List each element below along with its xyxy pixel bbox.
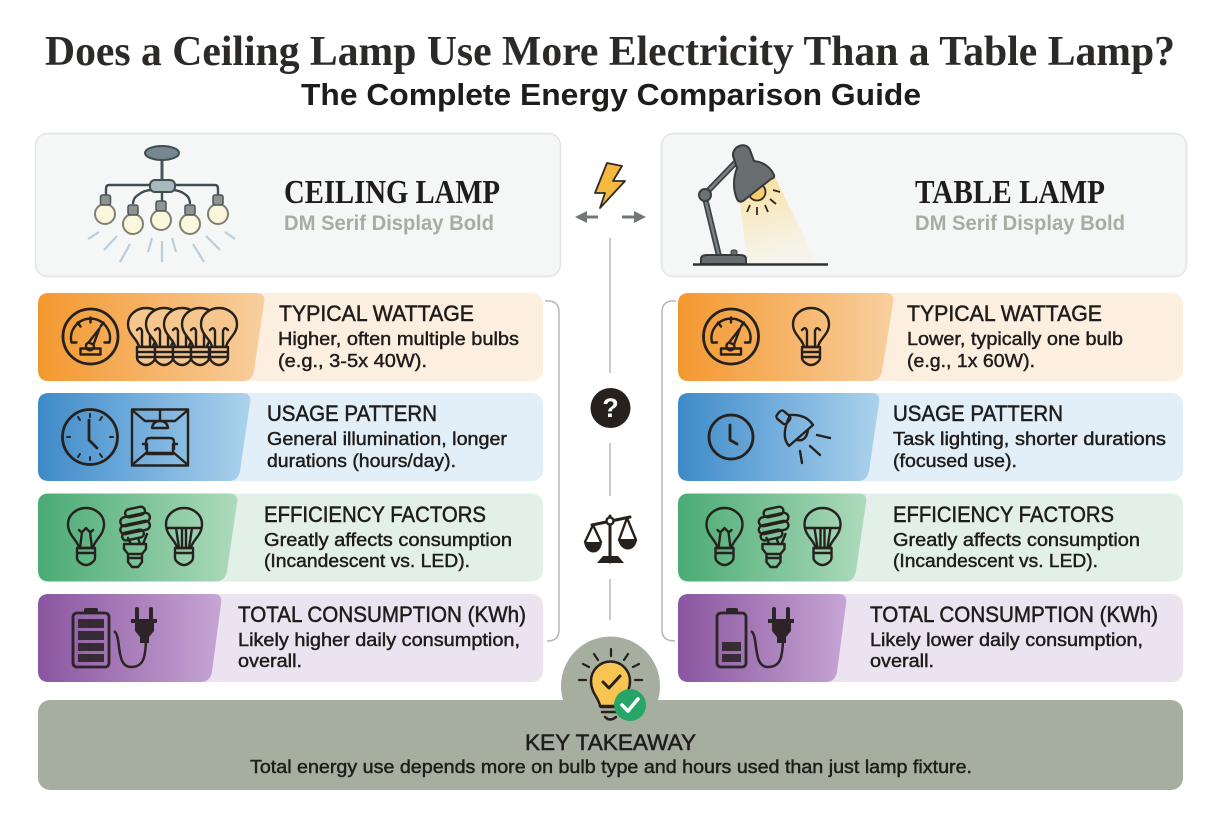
icon: three bulb types <box>706 506 840 567</box>
text: table consumption: TOTAL CONSUMPTION (KWh) <box>870 602 1158 627</box>
icon: gauge <box>63 309 118 364</box>
heading: key takeaway: KEY TAKEAWAY <box>525 730 696 755</box>
icon: lightbulb with check <box>579 649 646 721</box>
arrow: left <box>575 211 598 223</box>
caption: font note: DM Serif Display Bold <box>915 212 1125 235</box>
icon: five bulbs <box>128 308 237 365</box>
text: table efficiency: Greatly affects consumption <box>893 529 1140 550</box>
text: table usage: Task lighting, shorter durations <box>893 428 1166 449</box>
text: ceiling usage: General illumination, longer <box>267 428 507 449</box>
text: ceiling efficiency <box>264 502 512 571</box>
row: table usage pattern <box>678 393 1183 481</box>
text: table usage <box>893 401 1166 471</box>
text: table efficiency: EFFICIENCY FACTORS <box>893 502 1114 527</box>
text: ceiling usage <box>267 401 507 471</box>
text: table wattage <box>907 301 1123 371</box>
icon: three bulb types <box>68 506 202 567</box>
panel: key takeaway <box>38 636 1183 790</box>
row: ceiling efficiency factors <box>38 494 543 582</box>
row: table typical wattage <box>678 293 1183 381</box>
icon: low battery <box>717 608 746 667</box>
icon: question mark: ? <box>602 393 619 423</box>
icon: gauge <box>704 309 758 364</box>
icon: clock <box>709 415 753 459</box>
text: ceiling wattage: TYPICAL WATTAGE <box>279 301 474 326</box>
icon: lightning bolt <box>595 163 625 208</box>
text: ceiling consumption: Likely higher daily consumption, <box>238 629 520 650</box>
icon: single bulb <box>793 308 829 365</box>
title: Does a Ceiling Lamp Use More Electricity Than a Table Lamp? <box>45 29 1175 75</box>
text: table efficiency <box>893 502 1140 571</box>
icon: full battery <box>73 608 109 667</box>
heading: table lamp: TABLE LAMP <box>915 174 1105 211</box>
text: table wattage: Lower, typically one bulb <box>907 328 1123 349</box>
text: ceiling usage: USAGE PATTERN <box>267 401 437 426</box>
panel: ceiling lamp header <box>36 134 560 276</box>
icon: question mark <box>590 388 630 428</box>
icon: plug <box>751 609 794 667</box>
text: table efficiency: (Incandescent vs. LED). <box>893 550 1098 571</box>
icon: ceiling lamp <box>88 146 235 262</box>
icon: room with lamp and sofa <box>132 410 188 466</box>
text: table wattage: TYPICAL WATTAGE <box>907 301 1102 326</box>
text: ceiling wattage: (e.g., 3-5x 40W). <box>278 350 427 371</box>
subtitle: The Complete Energy Comparison Guide <box>301 77 921 112</box>
caption: font note: DM Serif Display Bold <box>284 212 494 235</box>
text: ceiling wattage <box>278 301 519 371</box>
text: ceiling consumption: TOTAL CONSUMPTION (KWh) <box>238 602 526 627</box>
text: ceiling efficiency: EFFICIENCY FACTORS <box>264 502 486 527</box>
icon: plug <box>114 609 157 667</box>
text: ceiling wattage: Higher, often multiple bulbs <box>278 328 519 349</box>
heading: ceiling lamp: CEILING LAMP <box>284 174 500 211</box>
row: table total consumption <box>678 594 1183 682</box>
text: table consumption <box>870 602 1158 671</box>
text: ceiling consumption <box>238 602 526 671</box>
text: table usage: USAGE PATTERN <box>893 401 1063 426</box>
text: takeaway: Total energy use depends more on bulb type and hours used than just lamp fixture. <box>250 757 972 777</box>
icon: table lamp <box>693 145 828 264</box>
text: table usage: (focused use). <box>893 450 1017 471</box>
text: ceiling consumption: overall. <box>238 650 302 671</box>
arrow: right <box>622 211 646 223</box>
row: table efficiency factors <box>678 494 1183 582</box>
icon: task lamp <box>775 409 830 463</box>
text: table wattage: (e.g., 1x 60W). <box>907 350 1035 371</box>
row: ceiling total consumption <box>38 594 543 682</box>
icon: balance scales <box>584 516 637 563</box>
text: ceiling usage: durations (hours/day). <box>267 450 456 471</box>
text: table consumption: overall. <box>870 650 934 671</box>
text: ceiling efficiency: (Incandescent vs. LED). <box>264 550 470 571</box>
row: ceiling usage pattern <box>38 393 543 481</box>
panel: table lamp header <box>662 134 1186 276</box>
text: ceiling efficiency: Greatly affects consumption <box>264 529 512 550</box>
text: table consumption: Likely lower daily consumption, <box>870 629 1143 650</box>
row: ceiling typical wattage <box>38 293 543 381</box>
icon: clock with ticks <box>62 410 118 464</box>
